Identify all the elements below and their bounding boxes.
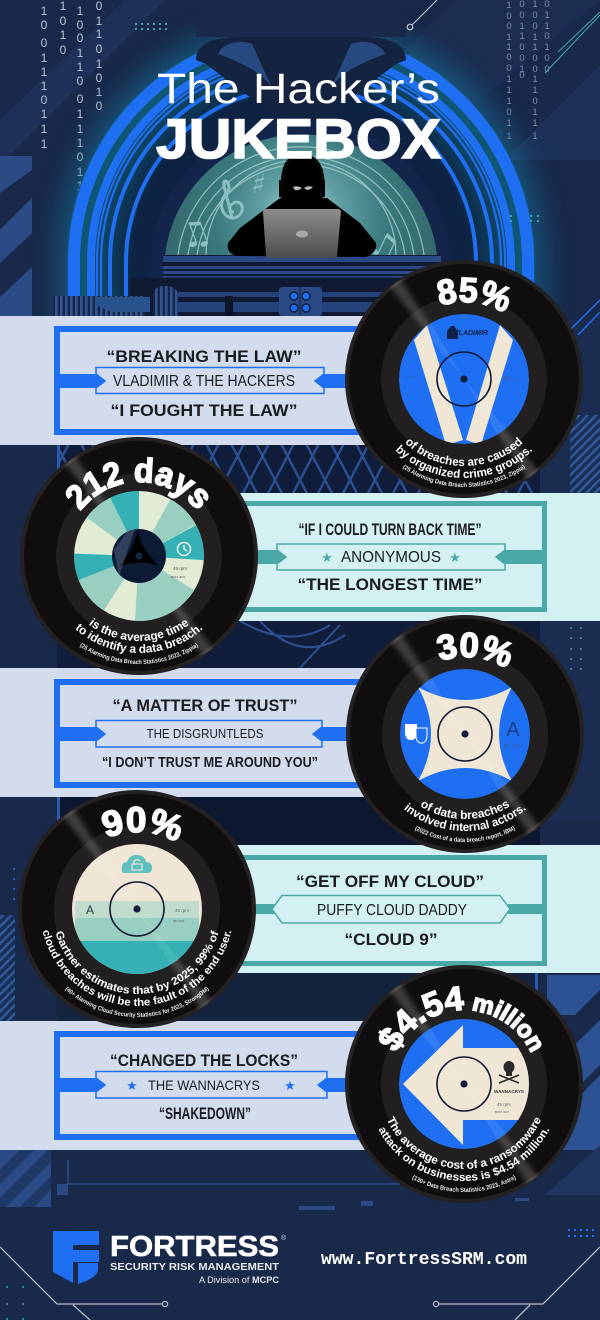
banner (96, 368, 324, 394)
title: JUKEBOX (156, 107, 441, 170)
binary columns: 1 (41, 79, 48, 93)
panel: song 2: “IF I COULD TURN BACK TIME” (298, 520, 482, 539)
binary columns: 1 (506, 32, 512, 43)
record: $4.54 million: (130+ Data Breach Statistics 2023, Astra) (412, 1175, 516, 1192)
panel: song 3: “A MATTER OF TRUST” (112, 696, 298, 715)
binary columns: 0 (77, 18, 84, 32)
panel: song 5: ★ (126, 1079, 138, 1094)
binary columns: 1 (41, 137, 48, 151)
label logo: VLADIMIR (454, 330, 488, 337)
binary columns: 0 (544, 31, 550, 42)
top cover (196, 0, 406, 37)
music dome (165, 135, 437, 255)
right blue panels (547, 975, 600, 1150)
record: 30%: involved internal actors. (404, 802, 526, 832)
label (399, 314, 529, 445)
record: $4.54 million: 45 rpm (497, 1102, 511, 1107)
record: 30%: 30% (436, 632, 512, 667)
shield icon (53, 1231, 99, 1284)
music staves (178, 147, 424, 255)
record: $4.54 million: attack on businesses is $4.54 million. (378, 1128, 550, 1181)
binary columns: 1 (544, 10, 550, 21)
binary columns: 0 (77, 150, 84, 164)
panel: song 5: “SHAKEDOWN” (159, 1104, 251, 1123)
binary columns: 1 (60, 28, 67, 42)
binary columns: 1 (532, 42, 538, 53)
banner (272, 896, 510, 923)
record: 90%: (40+ Alarming Cloud Security Statistics for 2023, StrongDM) (64, 986, 210, 1018)
binary columns: 1 (519, 21, 525, 32)
panel: song 4: “CLOUD 9” (344, 930, 438, 949)
panel: song 2: ★ (321, 551, 333, 566)
binary columns (41, 0, 550, 193)
binary columns: 1 (506, 118, 512, 129)
record: 90%: Gartner estimates that by 2025, 99% of (56, 930, 218, 994)
binary columns: 0 (96, 71, 103, 85)
arch body (67, 28, 535, 316)
hacker silhouette (228, 155, 376, 258)
binary columns: 0 (532, 53, 538, 64)
clock icon (178, 542, 190, 556)
record: 85%: 85% (436, 276, 510, 312)
binary columns: 0 (544, 64, 550, 75)
record: 85%: BD 4027 (405, 375, 419, 379)
binary columns: 0 (519, 70, 525, 81)
binary columns: 1 (532, 131, 538, 142)
binary columns: 1 (77, 46, 84, 60)
panel: song 1: “BREAKING THE LAW” (106, 347, 302, 366)
record: 85%: of breaches are caused (406, 436, 522, 466)
skull icon (499, 1061, 519, 1083)
panel: song 5: “CHANGED THE LOCKS” (110, 1051, 298, 1070)
footer decorations (0, 1145, 600, 1320)
binary columns: 1 (506, 85, 512, 96)
binary columns: 1 (506, 96, 512, 107)
binary columns: 1 (532, 118, 538, 129)
binary columns: 1 (506, 42, 512, 53)
circuit lines top (407, 0, 600, 73)
binary columns: 1 (532, 74, 538, 85)
record: 30%: (2022 Cost of a data breach report, IBM) (414, 826, 516, 842)
center hub (112, 529, 166, 583)
panel: song 1: VLADIMIR & THE HACKERS (113, 373, 295, 390)
music notes (174, 167, 406, 271)
binary columns: 1 (77, 179, 84, 193)
record: 212 days: BDST 4027 (171, 575, 186, 579)
background geometric shapes (0, 0, 600, 820)
record: 90%: BD 4027 (174, 919, 185, 923)
dot clusters (135, 23, 539, 222)
binary columns: 0 (60, 43, 67, 57)
binary columns: 1 (77, 107, 84, 121)
theatre masks icon (405, 724, 427, 743)
record: $4.54 million: BDST 4027 (495, 1110, 510, 1114)
panel: song 5: ★ (284, 1079, 296, 1094)
panel: song 4: PUFFY CLOUD DADDY (317, 902, 467, 919)
jukebox base stripes (53, 255, 478, 316)
record: 90%: cloud breaches will be the fault of the end user. (43, 930, 232, 1006)
panel: song 3: THE DISGRUNTLEDS (146, 726, 264, 741)
record: $4.54 million (345, 965, 583, 1203)
binary columns: 0 (506, 21, 512, 32)
panel: song 5 (0, 1021, 377, 1150)
binary columns: 0 (506, 52, 512, 63)
binary columns: 0 (506, 11, 512, 22)
panel: song 2: “THE LONGEST TIME” (298, 575, 482, 594)
label (72, 844, 202, 974)
binary columns: 1 (532, 107, 538, 118)
record: 212 days: 212 days (66, 456, 208, 512)
binary columns: 0 (60, 14, 67, 28)
record: 30%: 45 rpm (504, 744, 522, 750)
record: 90% (18, 790, 256, 1028)
binary columns: 1 (96, 14, 103, 28)
panel: song 1 (0, 316, 377, 445)
record: 85% (345, 260, 583, 498)
cloud lock icon (122, 855, 152, 873)
label (400, 669, 530, 799)
record: 30%: A (506, 719, 520, 741)
fortress logo: A Division of MCPC (199, 1275, 279, 1286)
middle patterned panels (0, 300, 600, 1180)
label wedges (74, 491, 204, 621)
banner (277, 544, 505, 570)
label logo (447, 326, 488, 339)
record: 85%: (25 Alarming Data Breach Statistics 2023, Zippia) (402, 464, 526, 488)
arch glow (55, 16, 547, 330)
binary columns: 0 (519, 10, 525, 21)
binary columns: 1 (41, 51, 48, 65)
binary columns: 0 (77, 92, 84, 106)
binary columns: 1 (41, 65, 48, 79)
binary columns: 1 (506, 0, 512, 11)
record: 212 days: (25 Alarming Data Breach Statistics 2023, Zippia) (80, 642, 198, 664)
binary columns: 1 (77, 136, 84, 150)
banner (96, 720, 322, 747)
fortress logo: FORTRESS (110, 1231, 279, 1263)
binary columns: 1 (96, 85, 103, 99)
panel: song 1: “I FOUGHT THE LAW” (110, 401, 298, 420)
panel: song 3: “I DON’T TRUST ME AROUND YOU” (102, 754, 318, 771)
record: 212 days: 45 rpm (173, 566, 187, 571)
binary columns: 1 (77, 60, 84, 74)
panel: song 2: ANONYMOUS (341, 549, 441, 566)
left diagonal stripes (0, 156, 32, 316)
panel: song 2 (225, 493, 600, 621)
circuit lines footer (0, 1247, 600, 1320)
binary columns: 1 (544, 42, 550, 53)
record: 212 days: to identify a data breach. (76, 624, 202, 654)
dark cap with combs (196, 37, 406, 114)
binary columns: 1 (77, 122, 84, 136)
blue neon rings (74, 35, 528, 296)
record: 90%: A (86, 903, 94, 917)
binary columns: 1 (506, 131, 512, 142)
fortress logo: ® (281, 1234, 287, 1242)
binary columns: 0 (41, 93, 48, 107)
record: 30% (346, 615, 584, 853)
record: 212 days: is the average time (89, 618, 188, 642)
dome surround (150, 119, 452, 421)
binary columns: 1 (41, 4, 48, 18)
binary columns: 1 (77, 165, 84, 179)
record: 212 days (20, 437, 258, 675)
record: 85%: 45 rpm (503, 374, 519, 383)
binary columns: 1 (41, 107, 48, 121)
binary columns: 0 (519, 42, 525, 53)
binary columns: 0 (544, 53, 550, 64)
record: 90%: 45 rpm (175, 908, 189, 913)
binary columns: 0 (532, 10, 538, 21)
music notes: ♫ (361, 222, 406, 271)
record: 90%: 90% (102, 806, 182, 841)
jukebox arch (53, 0, 547, 421)
banner (96, 1072, 327, 1098)
panel: song 4 (225, 845, 600, 973)
record: $4.54 million: WANNACRYS (494, 1089, 524, 1094)
binary columns: 0 (77, 31, 84, 45)
binary columns: 0 (96, 99, 103, 113)
binary columns: 1 (506, 74, 512, 85)
binary columns: 1 (532, 85, 538, 96)
fortress logo (53, 1231, 287, 1286)
binary columns: 1 (96, 57, 103, 71)
fortress logo: SECURITY RISK MANAGEMENT (110, 1261, 280, 1273)
title: The Hacker’s (157, 65, 440, 113)
laptop (263, 209, 341, 258)
binary columns: 1 (519, 64, 525, 75)
binary columns: 0 (506, 63, 512, 74)
control panel buttons (279, 287, 322, 316)
binary columns: 0 (532, 64, 538, 75)
website url: www.FortressSRM.com (321, 1250, 527, 1270)
binary columns: 1 (532, 32, 538, 43)
binary columns: 1 (96, 27, 103, 41)
record: 30%: of data breaches (421, 802, 509, 819)
binary columns: 1 (77, 4, 84, 18)
binary columns: 1 (41, 122, 48, 136)
binary columns: 1 (544, 21, 550, 32)
binary columns: 0 (506, 107, 512, 118)
binary columns: 0 (519, 53, 525, 64)
label (399, 1019, 534, 1149)
music notes: ♫ (174, 210, 217, 258)
binary columns: 0 (41, 36, 48, 50)
panel: song 5: THE WANNACRYS (148, 1077, 260, 1093)
binary columns: 0 (532, 21, 538, 32)
binary columns: 0 (77, 74, 84, 88)
title (156, 65, 441, 170)
binary columns: 1 (519, 31, 525, 42)
panel: song 4: “GET OFF MY CLOUD” (296, 872, 484, 891)
record: 85%: by organized crime groups. (396, 444, 532, 478)
record: $4.54 million: The average cost of a ransomware (388, 1116, 540, 1169)
music notes: ♯ (249, 167, 269, 202)
binary columns: 0 (96, 42, 103, 56)
binary columns: 0 (41, 18, 48, 32)
record: $4.54 million: $4.54 million (378, 986, 542, 1053)
panel: song 3 (0, 668, 377, 797)
binary columns: 0 (532, 96, 538, 107)
panel: song 2: ★ (449, 551, 461, 566)
